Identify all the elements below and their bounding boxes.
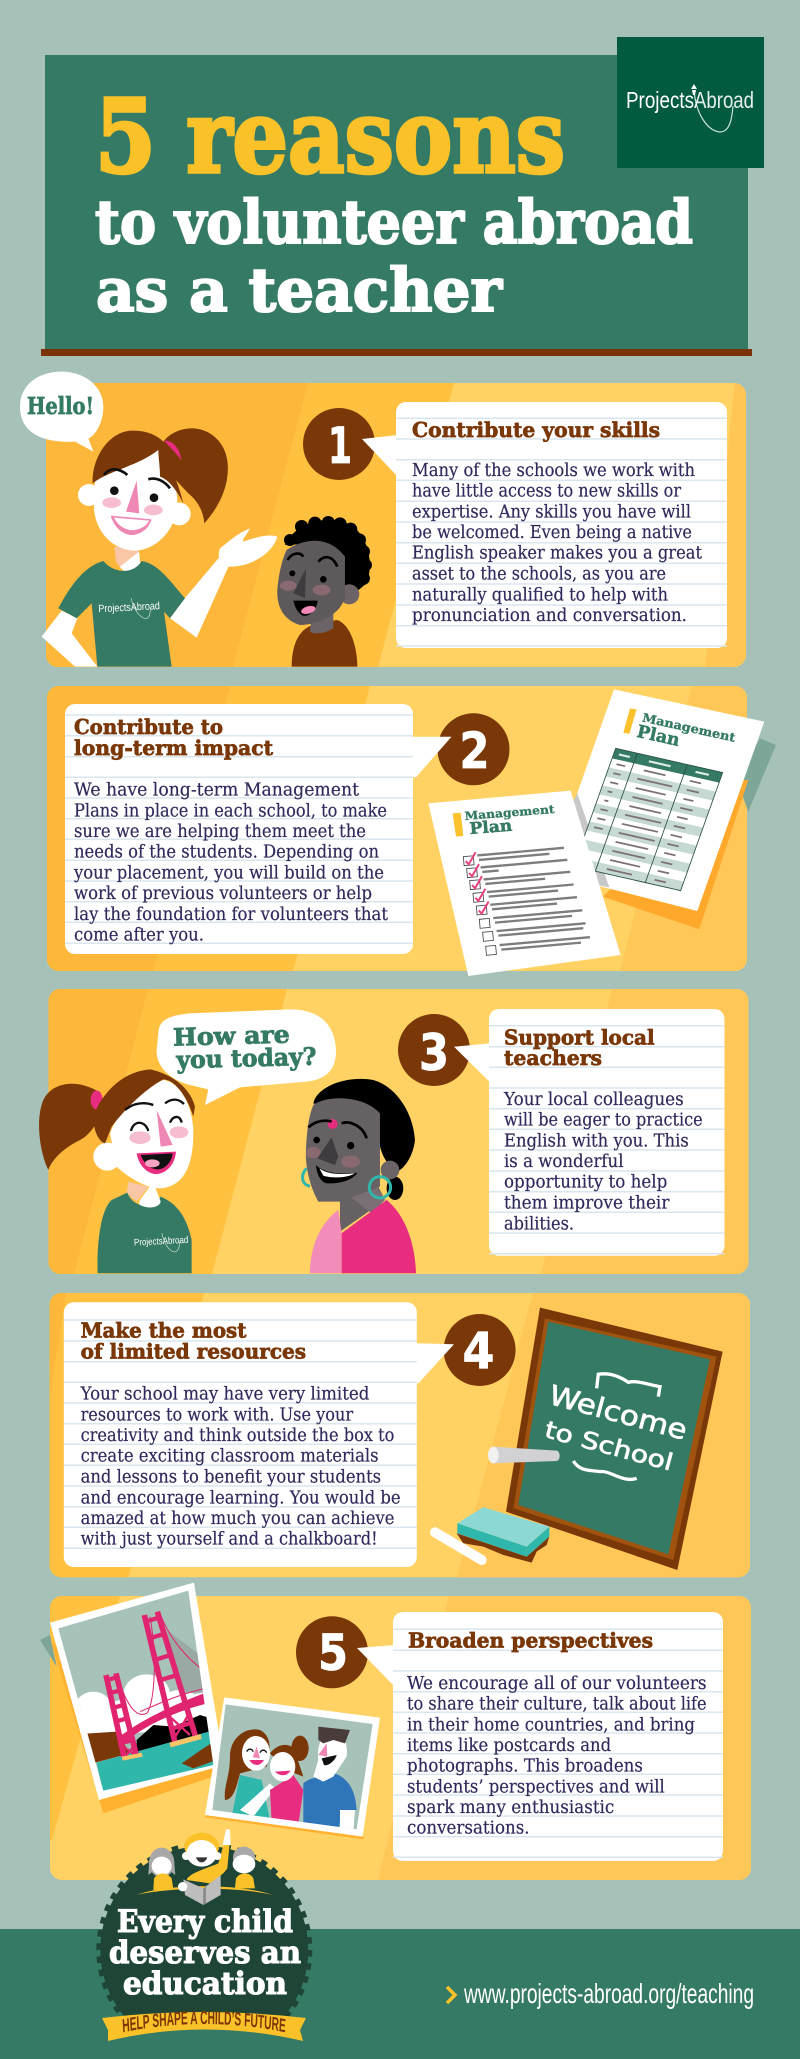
logo: Projects Abroad: Projects [626,87,694,113]
serrated seal [96,1844,312,2016]
card: contribute your skills: be welcomed. Even being a native [412,523,692,543]
panel background [50,1293,751,1578]
footer band [0,1929,800,2059]
speech bubble: Hello [20,372,103,452]
card: support local teachers: opportunity to help [504,1173,667,1193]
number badge 2 [438,713,510,785]
card: support local teachers: teachers [504,1046,602,1070]
card: limited resources: and lessons to benefit your students [81,1467,381,1487]
children reading [137,1829,273,1905]
card: limited resources: Make the most [81,1319,247,1343]
card: support local teachers [454,1009,724,1256]
card: long-term impact: long-term impact [74,736,274,760]
document: checklist plan [428,791,621,976]
number badge 4 [444,1314,516,1386]
card: broaden perspectives [357,1612,723,1861]
number badge 1: 1 [328,417,352,475]
header panel [41,37,764,356]
card: contribute your skills: Many of the schools we work with [412,461,695,481]
number badge 1 [303,408,375,480]
illustration: teacher and local colleague [39,1009,416,1273]
card: contribute your skills: Contribute your skills [412,418,660,442]
character: teacher [39,1069,195,1273]
card: broaden perspectives: conversations. [407,1819,530,1839]
card: support local teachers: English with you. This [504,1131,689,1151]
document: checklist plan: Management [464,802,556,823]
speech bubble: How are you today: you today? [175,1042,317,1074]
badge headline: education [123,1966,287,2002]
card: broaden perspectives: Broaden perspectives [408,1628,653,1652]
title: to volunteer abroad [95,188,693,258]
chalkboard: Welcome [546,1380,690,1447]
illustration: boy [277,516,372,667]
number badge 4: 4 [462,1322,494,1380]
card: support local teachers: Support local [504,1025,655,1049]
card: contribute your skills: pronunciation and conversation. [412,606,687,626]
logo: Projects Abroad [617,37,764,168]
speech bubble: Hello: Hello! [27,393,94,420]
card: long-term impact: your placement, you will build on the [73,863,384,883]
number badge 2: 2 [460,722,490,780]
card: contribute your skills: have little access to new skills or [412,482,682,502]
card: support local teachers: them improve their [504,1193,670,1213]
panel background [50,1596,751,1880]
card: limited resources: resources to work with. Use your [81,1405,354,1425]
card: long-term impact: Plans in place in each school, to make [74,801,387,821]
card: broaden perspectives: in their home countries, and bring [407,1715,695,1735]
chalk piece: white [435,1532,482,1560]
card: contribute your skills: asset to the schools, as you are [412,564,666,584]
document: table plan [549,689,776,929]
title [95,77,693,326]
badge headline [109,1904,301,2002]
panel background [46,383,746,667]
panel background [47,686,747,971]
card: support local teachers: abilities. [504,1214,574,1234]
card: long-term impact: Contribute to [74,715,223,739]
panel 3: support local teachers [39,989,748,1274]
badge headline: deserves an [109,1935,301,1971]
card: broaden perspectives: We encourage all of our volunteers [407,1674,707,1694]
illustration: chalkboard [435,1308,723,1570]
speech bubble: How are you today [157,1009,336,1105]
chalk piece: grey [488,1447,560,1463]
character: local colleague [303,1079,416,1273]
card: contribute your skills [362,402,727,648]
number badge 5 [296,1616,368,1688]
card: limited resources: and encourage learning. You would be [81,1488,401,1508]
card: long-term impact: sure we are helping them meet the [74,822,366,842]
card: long-term impact [65,704,452,954]
card: limited resources: creativity and think outside the box to [81,1426,394,1446]
illustration: management plan documents [428,689,776,976]
card: contribute your skills: expertise. Any skills you have will [412,502,691,522]
panel 5: broaden perspectives [40,1580,751,1880]
card: limited resources: with just yourself and a chalkboard! [81,1530,378,1550]
photo: bridge [40,1582,219,1814]
illustration: teacher: ProjectsAbroad [98,600,160,615]
number badge 3 [398,1014,470,1086]
card: broaden perspectives: items like postcards and [407,1736,611,1756]
document: table plan: Management [641,711,737,745]
illustration: photographs [40,1580,380,1839]
logo: Projects Abroad: Abroad [694,87,754,113]
number badge 3: 3 [419,1024,449,1082]
card: support local teachers: is a wonderful [504,1152,624,1172]
card: broaden perspectives: to share their culture, talk about life [407,1695,707,1715]
card: broaden perspectives: spark many enthusiastic [407,1798,614,1818]
chalkboard ledge [41,349,752,356]
character: teacher: ProjectsAbroad [134,1235,189,1249]
title: as a teacher [96,256,503,326]
card: broaden perspectives: photographs. This broadens [407,1757,643,1777]
panel 1: contribute your skills [20,372,746,667]
card: limited resources [64,1302,454,1567]
ribbon [102,2010,306,2041]
card: long-term impact: work of previous volunteers or help [74,884,372,904]
card: limited resources: amazed at how much you can achieve [81,1509,394,1529]
ribbon: HELP SHAPE A CHILD’S FUTURE [122,2010,286,2032]
document: checklist plan: Plan [469,816,513,838]
chalkboard [506,1308,723,1570]
card: limited resources: of limited resources [81,1339,306,1363]
panel background [48,989,748,1274]
badge headline: Every child [117,1904,293,1940]
photo: family [205,1697,380,1839]
card: broaden perspectives: students’ perspectives and will [407,1777,665,1797]
card: limited resources: Your school may have very limited [80,1385,369,1405]
panel 2: long-term impact [47,686,776,976]
panel 4: limited resources [50,1293,751,1578]
document: table plan: Plan [635,722,682,751]
number badge 5: 5 [318,1624,348,1682]
card: long-term impact: We have long-term Management [74,781,359,801]
card: support local teachers: will be eager to practice [504,1111,703,1131]
card: limited resources: create exciting classroom materials [81,1447,379,1467]
card: support local teachers: Your local colleagues [503,1090,684,1110]
title: 5 reasons [95,77,565,196]
card: contribute your skills: naturally qualified to help with [412,585,668,605]
card: contribute your skills: English speaker makes you a great [412,544,702,564]
eraser [457,1507,549,1563]
illustration: teacher [42,428,277,667]
chalkboard: to School [542,1415,676,1477]
card: long-term impact: lay the foundation for volunteers that [74,905,388,925]
card: long-term impact: needs of the students. Depending on [74,843,379,863]
chalkboard background [45,55,748,349]
card: long-term impact: come after you. [74,926,204,946]
speech bubble: How are you today: How are [173,1020,290,1052]
badge: every child deserves an education [96,1829,312,2041]
